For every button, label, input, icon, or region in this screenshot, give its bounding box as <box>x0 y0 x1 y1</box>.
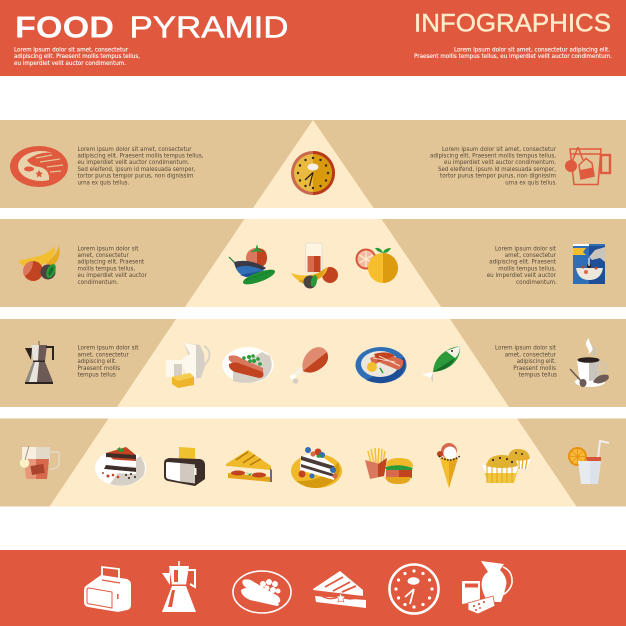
text block tier 1 right: adipiscing elit. Praesent mollis tempus tellus, <box>430 154 556 160</box>
icon: berry cake <box>291 447 342 488</box>
text block tier 1 left: tortor purus tempor purus, non dignissim <box>78 174 194 180</box>
text block tier 3 left: tempus tellus <box>78 372 116 378</box>
header intro text right: Lorem ipsum dolor sit amet, consectetur adipiscing elit. <box>454 48 610 54</box>
icon: juice glass with orange <box>568 441 609 484</box>
footer icon: wall clock <box>390 564 438 614</box>
pyramid tier 1 band <box>0 120 626 208</box>
text block tier 1 left: Sed eleifend, ipsum id malesuada semper, <box>78 167 196 173</box>
icon: chicken leg <box>290 347 328 384</box>
icon: cake slice on plate <box>95 447 146 486</box>
icon: sausage plate <box>222 347 274 383</box>
icon: tea mug outline <box>566 147 610 184</box>
subtitle: infographics: INFOGRAPHICS <box>414 10 611 38</box>
icon: banana and fruit <box>18 246 60 281</box>
text block tier 1 left: eu imperdiet velit auctor condimentum. <box>78 160 190 166</box>
footer icon: toaster <box>84 567 131 612</box>
icon: glass of tea <box>20 446 59 479</box>
footer banner <box>0 550 626 626</box>
text block tier 3 right: tempus tellus <box>519 372 557 378</box>
text block tier 3 right <box>495 346 557 378</box>
text block tier 1 left <box>78 147 204 186</box>
text block tier 2 left: eu imperdiet velit auctor <box>78 273 147 279</box>
icon: ice cream cone <box>437 443 460 488</box>
header intro text left: adipiscing elit. Praesent mollis tempus tellus, <box>14 54 140 60</box>
icon: muffins <box>482 449 531 483</box>
text block tier 3 left: adipiscing elit. <box>78 359 117 365</box>
text block tier 2 right: amet, consectetur <box>505 253 557 259</box>
icon: bacon plate <box>356 347 406 383</box>
text block tier 3 left: Lorem ipsum dolor sit <box>78 346 139 352</box>
footer icon: sausage plate <box>233 571 291 613</box>
header intro text right <box>414 48 612 60</box>
text block tier 3 right: amet, consectetur <box>505 352 557 358</box>
icon: citrus fruits <box>356 248 398 283</box>
header intro text right: Praesent mollis tempus tellus, eu imperdiet velit auctor condimentum. <box>414 54 612 60</box>
title: food pyramid <box>15 10 288 45</box>
icon: wall clock <box>291 151 335 195</box>
icon: fries and burger <box>365 448 413 484</box>
text block tier 2 left: amet, consectetur <box>78 253 129 259</box>
text block tier 2 right: Lorem ipsum dolor sit <box>495 246 557 252</box>
text block tier 2 right: adipiscing elit. Praesent <box>489 260 557 266</box>
text block tier 3 right: Praesent mollis <box>513 366 556 372</box>
title: food pyramid: FOOD <box>15 10 114 45</box>
text block tier 3 right: Lorem ipsum dolor sit <box>495 346 557 352</box>
footer icon: moka pot <box>162 561 196 612</box>
text block tier 2 right: condimentum. <box>516 280 557 286</box>
header intro text left: Lorem ipsum dolor sit amet, consectetur <box>14 48 129 54</box>
text block tier 2 left: adipiscing elit. Praesent <box>78 260 145 266</box>
title: food pyramid: PYRAMID <box>130 10 288 45</box>
pyramid tier 3 band <box>0 319 626 407</box>
text block tier 2 right: eu imperdiet velit auctor <box>487 273 557 279</box>
header intro text left: eu imperdiet velit auctor condimentum. <box>14 61 126 67</box>
text block tier 1 left: urna ex quis tellus. <box>78 180 129 186</box>
text block tier 3 left: amet, consectetur <box>78 352 129 358</box>
pyramid tier 4 band <box>0 418 626 506</box>
text block tier 2 left: mollis tempus tellus, <box>78 266 135 272</box>
icon: milk jug glass and cheese <box>166 343 209 388</box>
footer icon: milk jug glass and cheese <box>462 561 512 614</box>
header banner <box>0 0 626 76</box>
icon: moka pot <box>25 341 53 384</box>
text block tier 1 right: Sed eleifend, ipsum id malesuada semper, <box>438 167 556 173</box>
text block tier 1 left: Lorem ipsum dolor sit amet, consectetur <box>78 147 192 153</box>
icon: sandwich <box>226 450 272 482</box>
text block tier 1 right: urna ex quis tellus. <box>505 180 557 186</box>
icon: toaster <box>164 447 205 486</box>
icon: juice and fruit <box>291 243 338 288</box>
header intro text left <box>14 48 140 67</box>
text block tier 3 left: Praesent mollis <box>78 366 120 372</box>
text block tier 1 right: tortor purus tempor purus, non dignissim <box>440 174 556 180</box>
icon: cereal box <box>573 244 605 284</box>
icon: steak plate <box>10 146 68 187</box>
text block tier 3 left <box>78 346 139 378</box>
icon: vegetables <box>229 245 277 287</box>
text block tier 1 right: Lorem ipsum dolor sit amet, consectetur <box>442 147 557 153</box>
icon: coffee cup <box>570 338 609 387</box>
pyramid tier 2 band <box>0 219 626 307</box>
text block tier 2 left: Lorem ipsum dolor sit <box>78 246 139 252</box>
footer icon: sandwich <box>313 571 366 608</box>
text block tier 2 left <box>78 246 147 286</box>
text block tier 2 right <box>487 246 557 286</box>
text block tier 1 left: adipiscing elit. Praesent mollis tempus tellus, <box>78 154 204 160</box>
text block tier 1 right <box>430 147 557 186</box>
icon: fish <box>422 346 460 383</box>
text block tier 1 right: eu imperdiet velit auctor condimentum. <box>444 160 556 166</box>
text block tier 3 right: adipiscing elit. <box>517 359 556 365</box>
text block tier 2 left: condimentum. <box>78 280 119 286</box>
text block tier 2 right: mollis tempus tellus, <box>498 266 556 272</box>
